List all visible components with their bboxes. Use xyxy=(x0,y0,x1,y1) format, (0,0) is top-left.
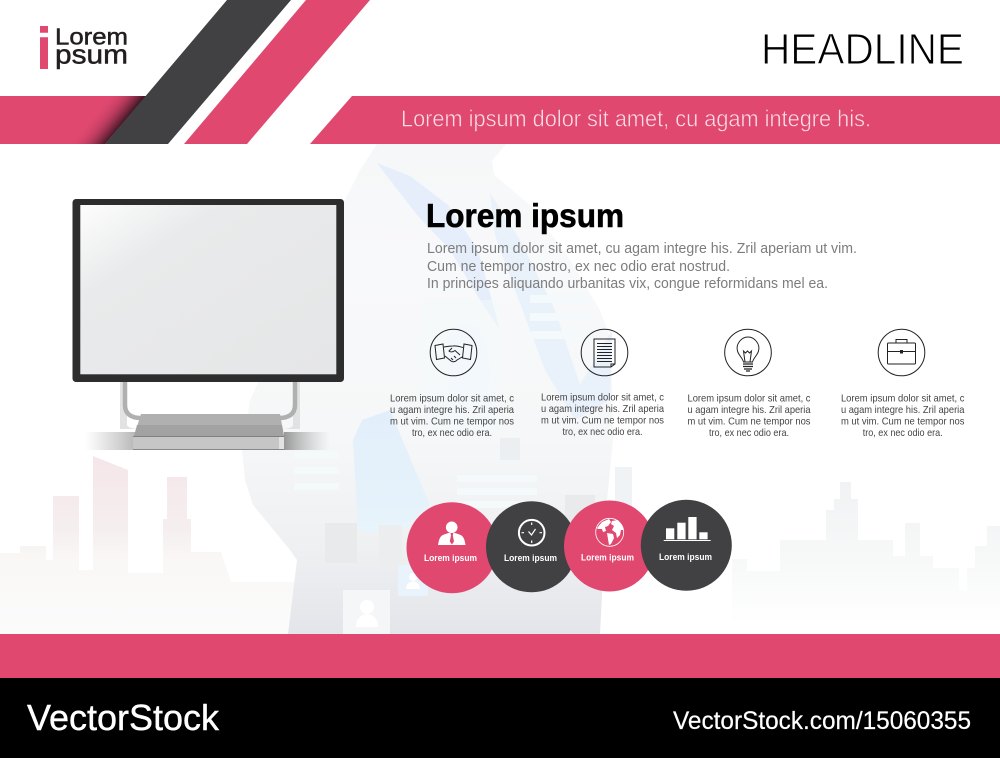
badge label: Lorem ipsum xyxy=(424,553,477,564)
monitor floor shadow right xyxy=(284,432,330,450)
icon: light bulb xyxy=(725,329,771,376)
badge label: Lorem ipsum xyxy=(581,552,634,564)
background: blue lapel right xyxy=(490,193,612,420)
description text xyxy=(841,394,965,439)
badge label: Lorem ipsum xyxy=(504,553,557,564)
description text: m ut vim. Cum ne tempor nos xyxy=(541,416,664,426)
section paragraph: In principes aliquando urbanitas vix, congue reformidans mel ea. xyxy=(427,276,828,292)
monitor base xyxy=(133,414,284,450)
description text: tro, ex nec odio era. xyxy=(562,427,642,438)
monitor illustration xyxy=(72,199,344,450)
description text: m ut vim. Cum ne tempor nos xyxy=(390,416,514,428)
feature column 3: idea xyxy=(688,329,811,439)
header stripe: dark diagonal xyxy=(105,0,291,144)
header subtitle: Lorem ipsum dolor sit amet, cu agam integre his. xyxy=(401,106,871,132)
footer pink band xyxy=(0,634,1000,678)
header band: right pink segment xyxy=(310,96,1000,144)
monitor stand arms xyxy=(125,381,295,418)
background: centre buildings xyxy=(325,438,632,565)
section paragraph xyxy=(427,241,857,292)
background: highlight stripes xyxy=(294,295,590,508)
circle badge 4: bar chart xyxy=(641,500,732,591)
logo xyxy=(40,24,128,70)
description text: tro, ex nec odio era. xyxy=(709,428,789,439)
description text xyxy=(390,394,514,439)
background: businessman silhouette xyxy=(242,144,632,634)
section heading: Lorem ipsum xyxy=(426,198,624,235)
footer black bar xyxy=(0,678,1000,758)
description text: tro, ex nec odio era. xyxy=(863,428,943,439)
watermark brand: VectorStock xyxy=(27,697,220,738)
background: blue lapel left xyxy=(377,163,500,330)
header stripe: pink diagonal xyxy=(184,0,370,144)
circle badge 3: globe xyxy=(564,500,655,592)
headline: HEADLINE xyxy=(761,25,964,74)
monitor floor shadow left xyxy=(85,432,135,450)
description text xyxy=(541,392,664,438)
icon: briefcase xyxy=(878,329,925,376)
description text: m ut vim. Cum ne tempor nos xyxy=(688,416,810,428)
background: head-shaped glow xyxy=(448,323,490,405)
section paragraph: Cum ne tempor nostro, ex nec odio erat nostrud. xyxy=(427,259,730,275)
background: profile card xyxy=(343,590,390,634)
feature column 4: business xyxy=(841,329,965,439)
circle badge 1: person xyxy=(406,502,498,593)
description text: Lorem ipsum dolor sit amet, c xyxy=(541,392,664,404)
icon: bar chart xyxy=(664,517,711,541)
logo text line two: psum xyxy=(55,40,128,70)
icon: globe xyxy=(596,518,624,546)
feature column 1: partnership xyxy=(390,329,514,439)
feature column 2: document xyxy=(541,329,664,438)
monitor stand back plate xyxy=(120,381,300,429)
watermark image id: VectorStock.com/15060355 xyxy=(673,707,971,735)
icon: clock xyxy=(519,520,544,546)
description text: Lorem ipsum dolor sit amet, c xyxy=(841,394,964,404)
header band: fold shadow xyxy=(60,96,146,144)
logo text line one: Lorem xyxy=(55,24,128,50)
logo mark: pink letter i xyxy=(40,26,48,69)
header band: left pink segment xyxy=(0,96,146,144)
icon: document xyxy=(581,329,628,376)
description text: Lorem ipsum dolor sit amet, c xyxy=(390,394,514,404)
description text: Lorem ipsum dolor sit amet, c xyxy=(688,394,810,404)
description text: u agam integre his. Zril aperia xyxy=(541,404,664,415)
badge label: Lorem ipsum xyxy=(659,552,712,563)
monitor bezel xyxy=(72,199,344,382)
description text: tro, ex nec odio era. xyxy=(412,428,492,439)
description text: m ut vim. Cum ne tempor nos xyxy=(841,416,964,428)
description text: u agam integre his. Zril aperia xyxy=(841,405,965,416)
circle badge 2: clock xyxy=(486,501,577,592)
background: left city skyline xyxy=(0,456,311,634)
section paragraph: Lorem ipsum dolor sit amet, cu agam integre his. Zril aperiam ut vim. xyxy=(427,241,857,257)
description text: u agam integre his. Zril aperia xyxy=(390,405,514,416)
icon: handshake xyxy=(430,329,477,376)
description text: u agam integre his. Zril aperia xyxy=(688,405,811,416)
background: right city skyline xyxy=(732,482,1000,630)
monitor screen xyxy=(80,205,336,374)
description text xyxy=(688,394,811,439)
background: small blue profile card xyxy=(398,565,428,596)
background: blue jacket panel xyxy=(353,410,430,535)
icon: businessman xyxy=(438,522,466,545)
